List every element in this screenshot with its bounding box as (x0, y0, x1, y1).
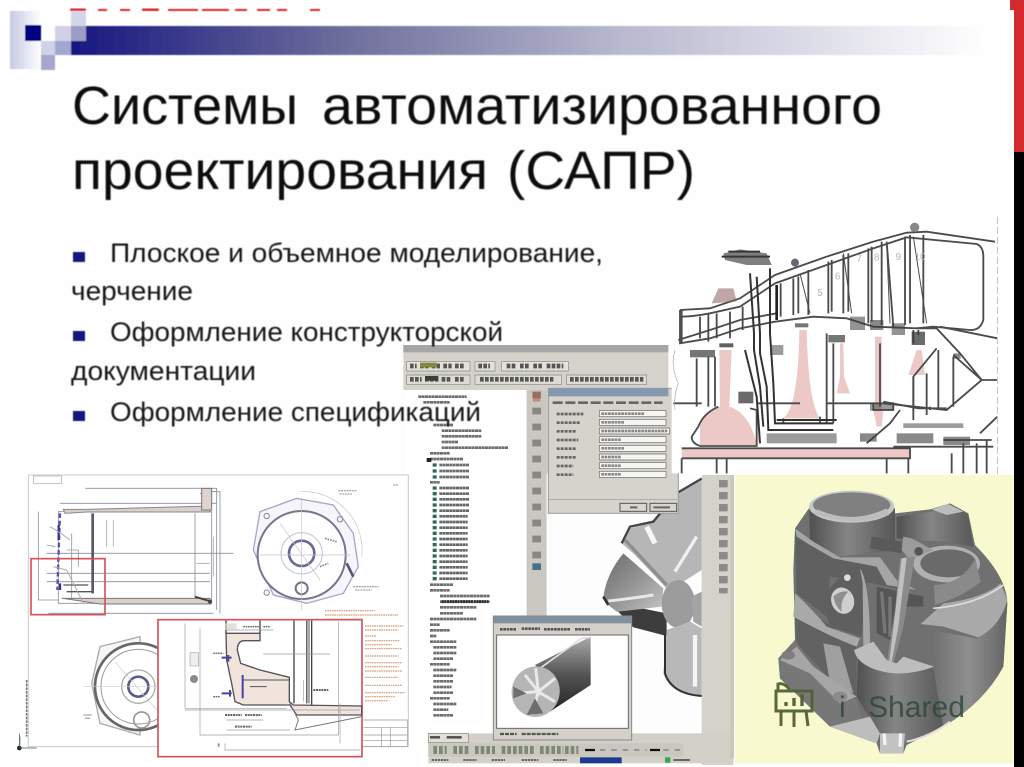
title: проектирования (72, 141, 488, 201)
watermark: iShared logo (776, 684, 965, 727)
header decoration: gradient bar and squares (10, 11, 986, 70)
ribs (870, 537, 902, 553)
panel: technical drawing with red callouts (17, 475, 409, 760)
stage numbers: 9 (896, 252, 902, 263)
right tool column (710, 480, 736, 593)
bottom flange (778, 640, 863, 727)
left lower wall (795, 615, 857, 697)
vertical tool column (524, 392, 550, 562)
title: (САПР) (507, 141, 695, 201)
bullet two: документации (71, 356, 256, 386)
watermark: iShared logo: i (839, 691, 846, 724)
model tree (418, 397, 508, 715)
stage numbers: 5 (817, 288, 823, 299)
pink rotor discs (682, 330, 925, 458)
bullet one: черчение (71, 276, 193, 306)
3D part view (603, 479, 702, 696)
bottom view (83, 637, 182, 735)
top right plateau (921, 583, 1007, 637)
bullet two: Оформление конструкторской (110, 317, 503, 347)
bullet list (71, 238, 603, 427)
title: автоматизированного (322, 76, 882, 136)
panel: CAD software window (403, 345, 733, 765)
stage numbers: 8 (874, 253, 880, 264)
vertical strut and flange (722, 252, 837, 443)
red callout: small (31, 559, 105, 615)
back wall (897, 505, 973, 547)
watermark: iShared logo: Shared (868, 691, 965, 724)
preview dialog (493, 616, 632, 740)
bolted details (690, 223, 970, 445)
stage numbers: 6 (835, 271, 841, 282)
title block (363, 720, 407, 747)
flange view (253, 492, 362, 610)
left wing (795, 528, 903, 617)
right lower wall (930, 603, 1007, 727)
panel: 3D cast housing on yellow (730, 475, 1013, 763)
side view of housing (38, 488, 233, 613)
properties dialog (548, 388, 678, 513)
housing body (778, 493, 1007, 753)
casing and stage outlines (673, 217, 997, 477)
bullet one: Плоское и объемное моделирование, (110, 238, 603, 268)
left margin notes and origin (24, 680, 29, 737)
clipped red heading remnant (70, 8, 320, 11)
bullet three: Оформление спецификаций (110, 397, 481, 427)
stage numbers (817, 252, 926, 299)
right edge strip (1010, 0, 1024, 767)
title (72, 76, 882, 201)
title: Системы (72, 76, 298, 136)
icon: presentation board (776, 684, 812, 727)
bottom toolbars and status bar (428, 733, 690, 763)
lower ledge (854, 642, 934, 673)
red callout: enlarged detail (158, 620, 362, 757)
bullet two (71, 317, 503, 386)
bullet one (71, 238, 603, 306)
second ring (910, 550, 980, 607)
boss plate with hole (823, 567, 867, 637)
toolbars (407, 362, 647, 384)
stage numbers: 7 (857, 254, 863, 265)
panel: turbine cross-section drawing (672, 210, 998, 477)
stage numbers: 10 (914, 252, 926, 263)
orange notes (325, 611, 405, 701)
top cylinder (809, 508, 895, 557)
